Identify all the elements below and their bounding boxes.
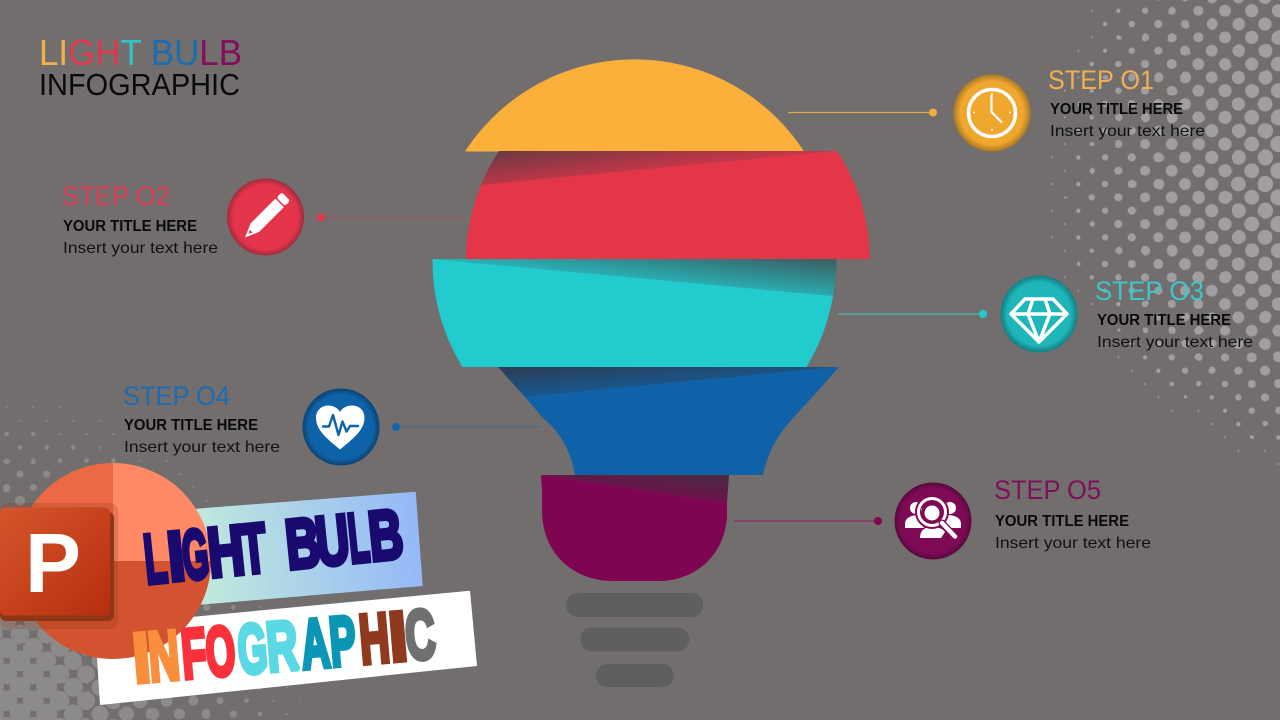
banner text: INFOGRAPHIC: I bbox=[386, 598, 410, 677]
step 2 bbox=[62, 178, 465, 257]
connector 3 bbox=[838, 310, 987, 318]
banner: infographic background bbox=[95, 591, 477, 705]
title: INFOGRAPHIC bbox=[39, 67, 240, 102]
step 1 bbox=[788, 65, 1205, 152]
banner text: INFOGRAPHIC: C bbox=[402, 596, 438, 676]
bulb segment 3: cyan bbox=[432, 259, 836, 367]
banner text: LIGHT BULB: I bbox=[164, 517, 188, 596]
step 4 text: STEP O4 bbox=[123, 381, 230, 411]
banner text: INFOGRAPHIC bbox=[130, 596, 438, 697]
logo square with P bbox=[0, 503, 118, 629]
step 1 text: YOUR TITLE HERE bbox=[1050, 101, 1183, 118]
step 2 text: Insert your text here bbox=[63, 240, 218, 257]
step 3 text: YOUR TITLE HERE bbox=[1097, 312, 1231, 329]
step 5 text: YOUR TITLE HERE bbox=[995, 513, 1129, 530]
icon: clock bbox=[954, 74, 1030, 152]
banner text: LIGHT BULB: U bbox=[312, 499, 353, 581]
step 4 text: YOUR TITLE HERE bbox=[124, 417, 258, 434]
step 3 text bbox=[1095, 276, 1253, 351]
banner text: INFOGRAPHIC: G bbox=[234, 608, 270, 689]
step 5 bbox=[734, 475, 1151, 560]
step 1 text: STEP O1 bbox=[1048, 65, 1154, 95]
banner: light bulb background bbox=[180, 492, 423, 606]
step 5 text: Insert your text here bbox=[995, 535, 1151, 552]
bulb base bbox=[566, 593, 703, 687]
banner text: LIGHT BULB: L bbox=[344, 497, 373, 578]
step 3 text: Insert your text here bbox=[1097, 334, 1253, 351]
banner text: LIGHT BULB: H bbox=[204, 511, 248, 592]
bulb segment 1: yellow bbox=[465, 59, 804, 152]
bulb segment 5: magenta bbox=[541, 475, 729, 581]
light bulb bbox=[432, 59, 870, 687]
banner text: INFOGRAPHIC: N bbox=[145, 617, 183, 697]
banner text: LIGHT BULB: T bbox=[237, 509, 270, 590]
icon: pencil bbox=[227, 178, 304, 256]
step 2 text: STEP O2 bbox=[62, 181, 170, 211]
title: LIGHT BULB bbox=[39, 32, 242, 73]
step 1 text bbox=[1048, 65, 1205, 140]
connector 5 bbox=[734, 517, 882, 525]
connector 1 bbox=[788, 108, 937, 116]
icon: PowerPoint logo bbox=[0, 463, 211, 659]
icon: people search bbox=[894, 482, 972, 560]
step 4 text: Insert your text here bbox=[124, 439, 280, 456]
connector 4 bbox=[392, 423, 540, 431]
icon: heart with pulse bbox=[302, 388, 380, 466]
step 3 text: STEP O3 bbox=[1095, 276, 1204, 306]
banner text: LIGHT BULB: B bbox=[282, 502, 324, 584]
icon: diamond bbox=[1000, 276, 1078, 352]
banner text: INFOGRAPHIC: H bbox=[356, 599, 393, 679]
logo circle bbox=[15, 463, 211, 659]
banner text: LIGHT BULB: L bbox=[140, 519, 170, 599]
banner text: INFOGRAPHIC: A bbox=[298, 605, 333, 685]
banner text: LIGHT BULB bbox=[140, 494, 407, 599]
step 2 text: YOUR TITLE HERE bbox=[63, 218, 197, 235]
banner text: INFOGRAPHIC: F bbox=[178, 614, 210, 694]
bulb segment 4: blue bbox=[498, 367, 839, 475]
banner text: INFOGRAPHIC: P bbox=[326, 603, 359, 682]
banner text: INFOGRAPHIC: O bbox=[202, 611, 238, 691]
banner text: LIGHT BULB: B bbox=[365, 494, 407, 576]
banner text: INFOGRAPHIC: R bbox=[263, 606, 301, 687]
banner text: LIGHT BULB: G bbox=[178, 514, 212, 595]
connector 2 bbox=[317, 214, 465, 222]
step 2 text bbox=[62, 181, 218, 257]
title bbox=[39, 32, 242, 102]
step 1 text: Insert your text here bbox=[1050, 123, 1205, 140]
step 4 bbox=[123, 381, 540, 466]
bulb segment 2: red bbox=[466, 151, 870, 259]
step 3 bbox=[838, 276, 1253, 352]
step 4 text bbox=[123, 381, 280, 456]
logo square with P: P bbox=[25, 516, 81, 610]
banner text: INFOGRAPHIC: I bbox=[130, 618, 153, 697]
step 5 text: STEP O5 bbox=[994, 475, 1101, 505]
step 5 text bbox=[994, 475, 1151, 552]
